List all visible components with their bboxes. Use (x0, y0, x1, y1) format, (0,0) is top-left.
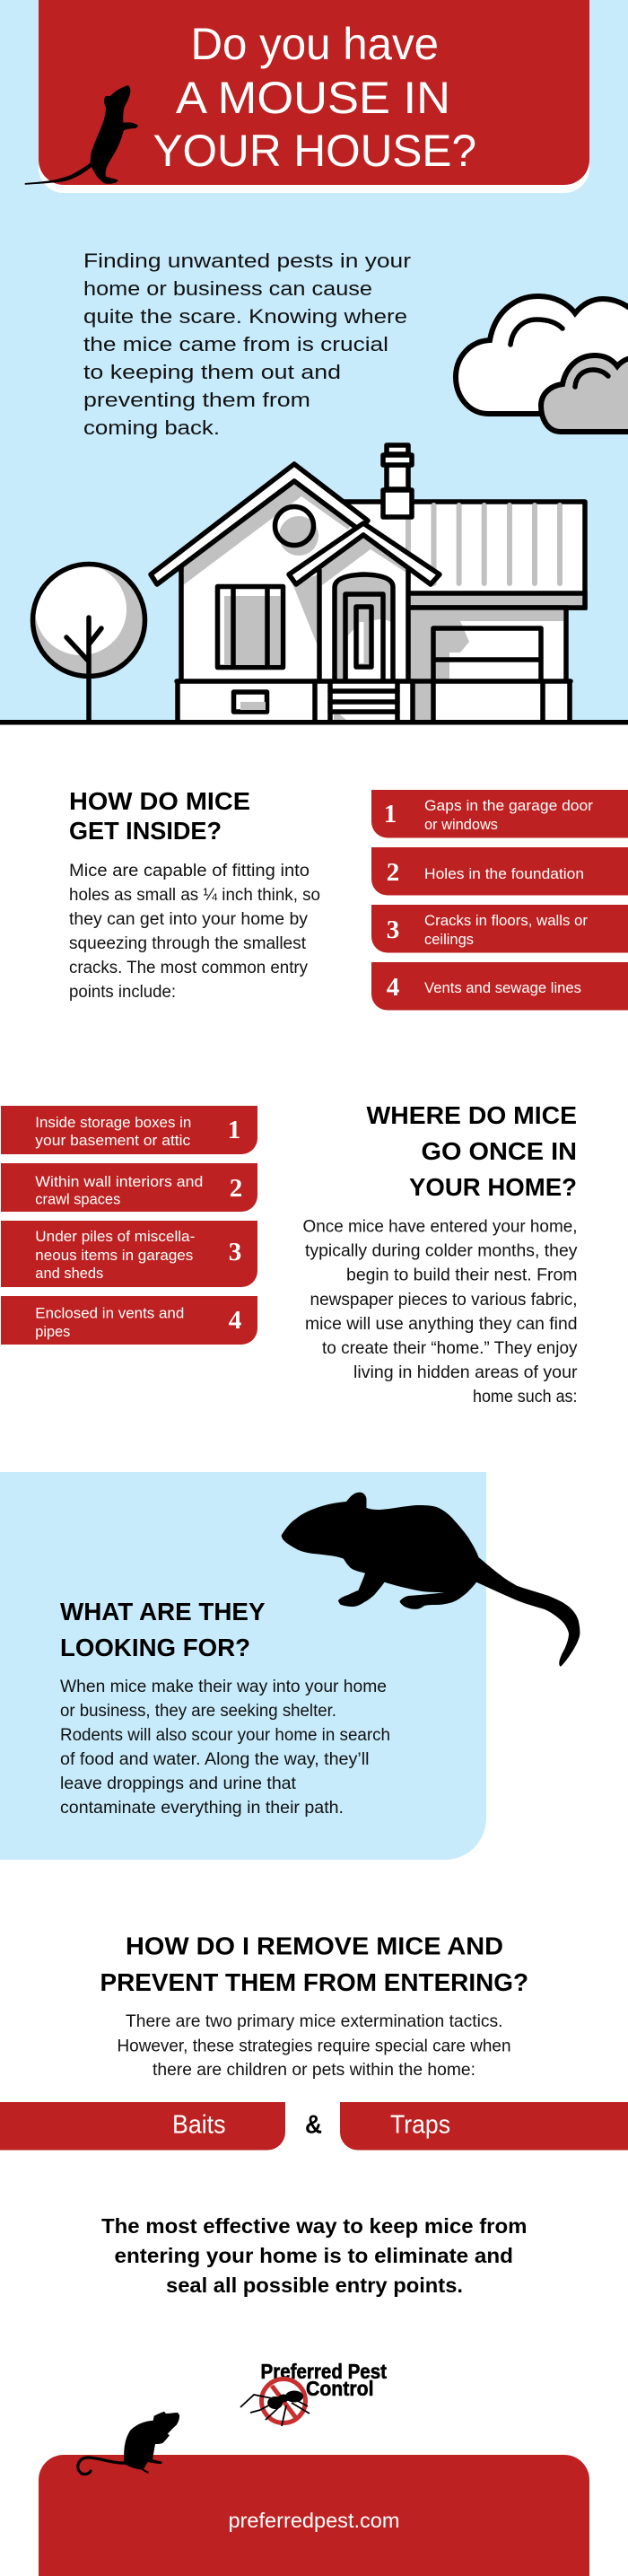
text block: intro paragraph: to keeping them out and (83, 361, 341, 383)
heading: what are they looking for: WHAT ARE THEY (60, 1598, 266, 1625)
icon: standing mouse silhouette (25, 85, 138, 185)
text block: closing statement: The most effective way to keep mice from (101, 2214, 528, 2238)
icon: clouds (456, 296, 628, 432)
icon: grey cloud (541, 355, 628, 432)
list: entry points (371, 790, 628, 1011)
entry point 1: or windows (424, 816, 498, 833)
text block: extermination tactics (117, 2012, 511, 2080)
nesting place 3: 3 (229, 1238, 241, 1266)
ground line (0, 720, 628, 725)
text block: closing statement: entering your home is to eliminate and (115, 2244, 513, 2267)
text block: how do mice get inside (69, 862, 320, 1002)
text block: what are they looking for: leave droppings and urine that (60, 1774, 297, 1793)
logo wordmark: Control (306, 2377, 373, 2400)
nesting place 2 (1, 1163, 257, 1212)
logo insect (240, 2391, 310, 2426)
title text: A MOUSE IN (176, 73, 450, 123)
panel: title banner (39, 0, 589, 193)
nesting place 3: and sheds (35, 1265, 103, 1282)
logo wordmark (260, 2360, 387, 2400)
icon: large mouse silhouette (282, 1493, 580, 1667)
icon: tree (32, 564, 145, 720)
garage door (433, 628, 541, 720)
nesting place 1: your basement or attic (35, 1132, 191, 1149)
nesting place 2: 2 (230, 1174, 242, 1203)
callout: traps (340, 2102, 628, 2151)
heading: how do I remove mice (100, 1932, 528, 1996)
nesting place 1 (1, 1106, 257, 1154)
text block: intro paragraph: preventing them from (83, 389, 310, 411)
callout: baits (0, 2102, 285, 2151)
callout: traps: Traps (390, 2111, 450, 2140)
entry point 1 (371, 790, 628, 838)
nesting place 2: crawl spaces (35, 1190, 120, 1208)
main wall lines (179, 567, 184, 679)
logo prohibition sign (262, 2379, 305, 2423)
text block: how do mice get inside: cracks. The most common entry (69, 959, 308, 977)
entry point 4 (371, 962, 628, 1011)
nesting place 1: Inside storage boxes in (35, 1114, 191, 1131)
heading: how do I remove mice: PREVENT THEM FROM ENTERING? (100, 1968, 528, 1996)
text block: intro paragraph: quite the scare. Knowing where (83, 305, 407, 328)
entry point 1: Gaps in the garage door (424, 797, 593, 814)
text block: where do mice go (303, 1217, 578, 1406)
main gable wall (181, 478, 359, 682)
entry point 1: 1 (384, 800, 397, 828)
text block: intro paragraph: home or business can cause (83, 277, 372, 300)
text block: intro paragraph: the mice came from is crucial (83, 333, 388, 355)
text block: intro paragraph (83, 250, 412, 439)
text block: where do mice go: newspaper pieces to various fabric, (310, 1291, 578, 1310)
text block: intro paragraph: coming back. (83, 416, 220, 439)
porch roof (289, 523, 440, 584)
text block: where do mice go: begin to build their nest. From (346, 1266, 578, 1285)
heading: how do mice get inside (69, 787, 250, 845)
nesting place 4 (1, 1296, 257, 1345)
text block: how do mice get inside: holes as small as ¼ inch think, so (69, 886, 320, 905)
entry point 4: 4 (387, 973, 399, 1002)
icon: white cloud (456, 296, 628, 414)
logo wordmark: Preferred Pest (260, 2360, 387, 2383)
text: ampersand: & (305, 2111, 322, 2140)
title text: YOUR HOUSE? (153, 126, 476, 176)
heading: where do mice go: YOUR HOME? (409, 1173, 577, 1201)
text block: how do mice get inside: they can get into your home by (69, 910, 309, 929)
main roof (151, 464, 368, 584)
icon: crouching mouse silhouette (78, 2412, 179, 2475)
text block: what are they looking for: Rodents will also scour your home in search (60, 1726, 390, 1745)
plinth and steps (177, 681, 571, 721)
entry point 2 (371, 847, 628, 896)
panel: footer (39, 2455, 589, 2576)
nesting place 1: 1 (228, 1116, 240, 1144)
text block: where do mice go: living in hidden areas of your (353, 1363, 578, 1382)
panel: what are they looking for (0, 1472, 486, 1860)
text block: where do mice go: to create their “home.” They enjoy (322, 1339, 578, 1358)
list: nesting places (1, 1106, 257, 1345)
nesting place 4: 4 (229, 1306, 241, 1335)
text block: what are they looking for: When mice make their way into your home (60, 1678, 387, 1696)
title text: Do you have (190, 19, 439, 69)
text block: where do mice go: mice will use anything they can find (305, 1315, 578, 1334)
icon: house (0, 445, 628, 725)
entry point 3: ceilings (424, 931, 474, 948)
text block: how do mice get inside: Mice are capable of fitting into (69, 862, 310, 881)
nesting place 3: Under piles of miscella- (35, 1228, 195, 1245)
nesting place 3 (1, 1221, 257, 1287)
text block: how do mice get inside: squeezing through the smallest (69, 934, 307, 953)
text block: extermination tactics: However, these strategies require special care when (117, 2037, 511, 2055)
text block: closing statement (101, 2214, 528, 2297)
porch gable shadow (322, 530, 406, 585)
text block: what are they looking for: contaminate everything in their path. (60, 1799, 344, 1818)
text block: where do mice go: Once mice have entered your home, (303, 1217, 578, 1237)
text block: where do mice go: typically during colder months, they (305, 1242, 578, 1260)
callout: baits: Baits (172, 2111, 226, 2140)
text block: extermination tactics: There are two primary mice extermination tactics. (126, 2012, 502, 2031)
heading: what are they looking for: LOOKING FOR? (60, 1634, 250, 1661)
panel: sky hero background (0, 0, 628, 722)
text block: what are they looking for (60, 1678, 390, 1818)
text block: extermination tactics: there are children or pets within the home: (153, 2061, 475, 2080)
text block: where do mice go: home such as: (473, 1388, 578, 1406)
heading: how do mice get inside: HOW DO MICE (69, 787, 250, 815)
heading: where do mice go: WHERE DO MICE (366, 1101, 577, 1129)
chimney (383, 445, 412, 517)
heading: what are they looking for (60, 1598, 266, 1661)
entry point 4: Vents and sewage lines (424, 979, 581, 996)
arched doorway (335, 574, 393, 679)
garage shadow (410, 610, 563, 720)
entry point 3: Cracks in floors, walls or (424, 912, 588, 929)
porch shadow on wall (292, 574, 318, 648)
nesting place 4: Enclosed in vents and (35, 1305, 184, 1321)
text block: closing statement: seal all possible entry points. (166, 2274, 463, 2297)
back roof (341, 502, 585, 608)
entry point 3: 3 (387, 916, 399, 944)
title text (153, 19, 476, 176)
text block: intro paragraph: Finding unwanted pests in your (83, 250, 412, 272)
logo: Preferred Pest Control (240, 2360, 387, 2426)
nesting place 2: Within wall interiors and (35, 1173, 203, 1190)
garage door frame (433, 628, 541, 720)
entry point 2: Holes in the foundation (424, 865, 584, 882)
front window (217, 587, 283, 668)
porch wall lines (319, 570, 408, 679)
heading: where do mice go (366, 1101, 577, 1201)
entry point 3 (371, 905, 628, 953)
porch gable wall (319, 531, 408, 679)
nesting place 4: pipes (35, 1323, 70, 1340)
text block: what are they looking for: or business, they are seeking shelter. (60, 1702, 336, 1721)
text block: how do mice get inside: points include: (69, 983, 176, 1002)
gable shadow (183, 476, 359, 585)
entry point 2: 2 (387, 858, 399, 887)
heading: where do mice go: GO ONCE IN (422, 1137, 577, 1165)
nesting place 3: neous items in garages (35, 1247, 193, 1264)
footer url: preferredpest.com (228, 2509, 400, 2532)
heading: how do I remove mice: HOW DO I REMOVE MICE AND (126, 1932, 503, 1960)
heading: how do mice get inside: GET INSIDE? (69, 817, 222, 845)
round window (275, 506, 318, 556)
text block: what are they looking for: of food and water. Along the way, they’ll (60, 1750, 369, 1769)
garage wall (407, 608, 566, 720)
